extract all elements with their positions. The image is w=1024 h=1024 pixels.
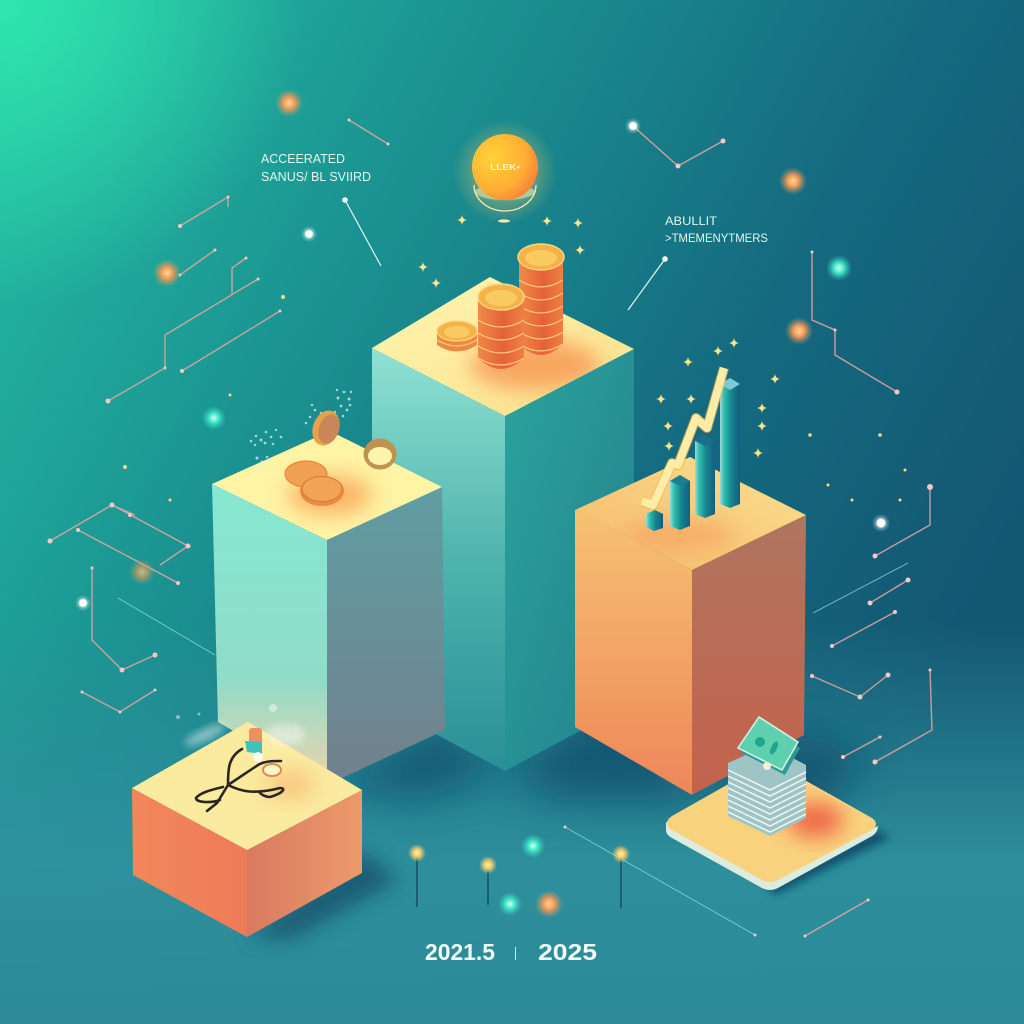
circuit network dots [48, 118, 933, 938]
callout text: right: ABULLIT [665, 214, 718, 228]
cash stack [728, 717, 806, 836]
flat coins [285, 461, 344, 506]
sparkle dust [176, 704, 305, 750]
circuit network lines [50, 120, 932, 936]
callout text: right [665, 214, 768, 245]
panel: center tall block [372, 277, 634, 771]
panel: left block [212, 431, 445, 785]
left face [212, 484, 327, 785]
bars [646, 378, 740, 531]
callout text: left [261, 151, 371, 184]
callout text: right: >TMEMENYTMERS [665, 231, 768, 245]
medium coin stack [478, 284, 524, 369]
year labels: 2025 [538, 939, 597, 965]
top face [372, 277, 634, 416]
speckled dust [250, 389, 352, 470]
callout text: left: SANUS/ BL SVIIRD [261, 169, 371, 184]
icon: coin stacks [437, 244, 564, 369]
warm glow on top [265, 770, 315, 800]
lamp posts [408, 844, 630, 908]
arrow line [642, 368, 724, 505]
banknote [738, 717, 800, 775]
right face [327, 487, 445, 785]
top face [212, 431, 442, 540]
top face [132, 722, 362, 850]
icon: scattered coins and dust [250, 389, 396, 506]
callout text: left: ACCEERATED [261, 151, 345, 166]
leader line: left [342, 197, 381, 266]
icon: glowing sphere [453, 120, 557, 224]
plate top [667, 763, 876, 882]
tall coin stack [518, 244, 564, 355]
bar chart with rising arrow [642, 338, 780, 531]
year labels [425, 939, 597, 965]
shadow of plate [765, 830, 890, 895]
warm glow on top [470, 340, 600, 390]
warm shading on top [625, 520, 735, 550]
right face [692, 515, 806, 795]
left face [132, 788, 247, 937]
ring coin [364, 438, 396, 470]
chart sparkles [656, 338, 780, 458]
year labels: 2021.5 [425, 939, 495, 965]
panel: flat plate with cash stack [666, 717, 878, 890]
small ring [263, 764, 281, 776]
small figure [245, 728, 263, 762]
floor shadows [327, 690, 870, 830]
panel: right block [575, 457, 806, 795]
left face [372, 348, 505, 771]
tilted coin [308, 407, 344, 449]
warm glow on top [288, 475, 372, 515]
small scattered dots [123, 295, 906, 502]
left face [575, 510, 692, 795]
knot / scissors icon [196, 749, 283, 811]
right face [505, 349, 634, 771]
plate edge [666, 822, 878, 890]
leader line: right [628, 256, 668, 310]
sparkles around coins [418, 215, 585, 288]
icon: glowing sphere: LLEK• [490, 163, 520, 172]
top face [575, 457, 806, 570]
single small coin pile [437, 321, 477, 352]
red shadow on plate [787, 802, 843, 838]
right face [247, 790, 362, 937]
panel: low front block [132, 704, 362, 937]
shadow of low block [247, 850, 400, 940]
glowing nodes [75, 89, 890, 918]
